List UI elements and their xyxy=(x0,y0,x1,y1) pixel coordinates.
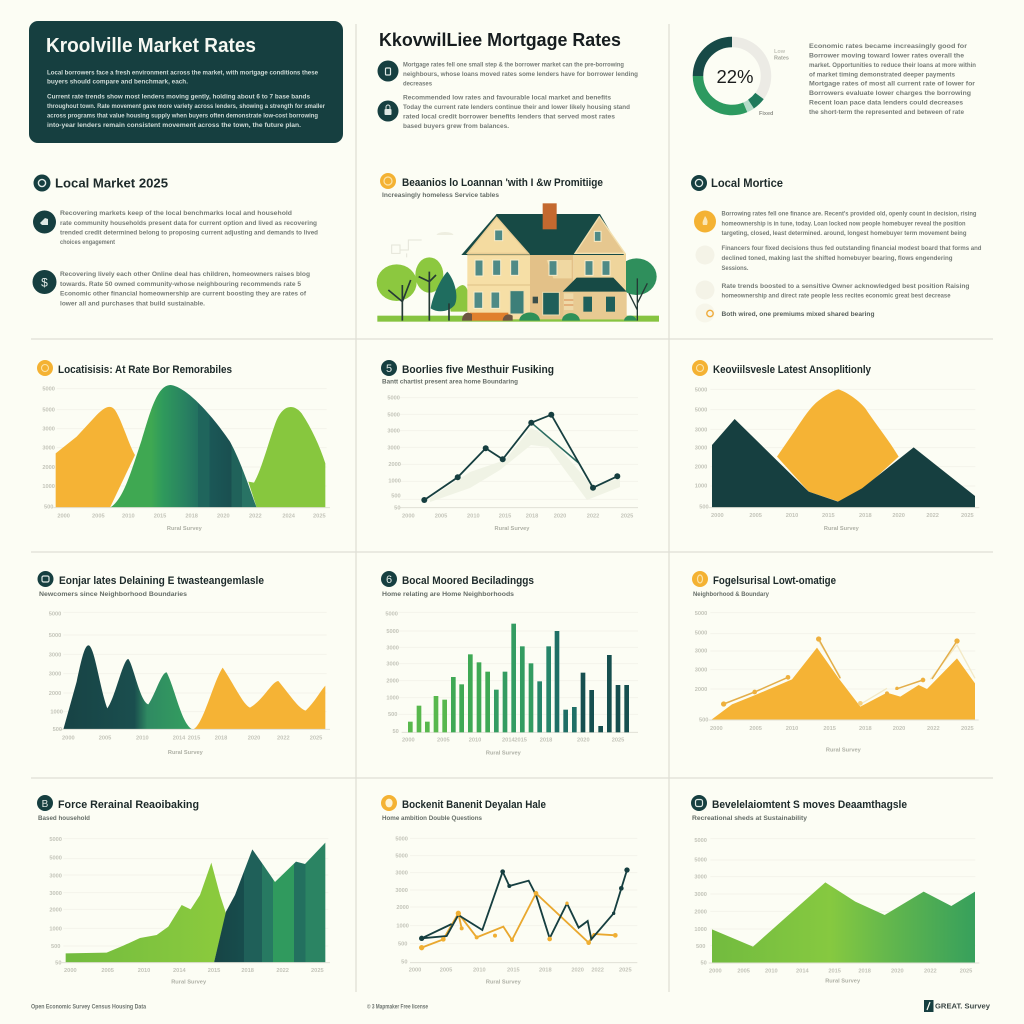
text block: card summary xyxy=(47,70,325,129)
icon: yellow badge xyxy=(37,360,53,376)
area chart with markers: 3000 xyxy=(695,649,707,655)
area chart: 3000 xyxy=(49,873,62,879)
line chart: 500 xyxy=(391,494,401,500)
icon: dark badge six: 6 xyxy=(386,574,392,586)
text block: market note two: Economic other financial homeownership are current boosting they are rates of xyxy=(60,290,307,298)
area chart: 1000 xyxy=(49,926,62,932)
text block: market note two: Recovering lively each other Online deal has children, homeowners raises blog xyxy=(60,271,310,278)
area chart: 2025 xyxy=(961,513,974,519)
area chart: 2015 xyxy=(208,968,220,974)
area chart: 2025 xyxy=(311,968,324,974)
text block: market note two xyxy=(60,271,310,308)
donut value: 22% xyxy=(716,66,754,87)
area chart: 2020 xyxy=(248,736,260,742)
area chart with markers: 2000 xyxy=(710,726,723,732)
bar chart: 2005 xyxy=(437,737,450,743)
line chart: 2018 xyxy=(526,513,538,519)
area chart: 3000 xyxy=(42,427,55,433)
area chart xyxy=(49,837,330,985)
area chart: 2000 xyxy=(709,968,722,974)
icon: dark badge xyxy=(691,795,707,811)
area chart: 2000 xyxy=(49,908,62,914)
area chart: 2000 xyxy=(694,909,707,915)
area chart: 2010 xyxy=(136,736,149,742)
text block: notice three: homeownership and direct rate people less recites economic great best decrease xyxy=(722,292,951,300)
text block: donut explanation: Borrowers evaluate lower charges the borrowing xyxy=(809,90,971,97)
text block: donut explanation: of market timing demonstrated deeper payments xyxy=(809,72,955,78)
area chart: 2018 xyxy=(858,968,871,974)
line chart two series: 50 xyxy=(401,960,407,966)
area chart: 2010 xyxy=(765,968,778,974)
text block: card summary: buyers should compare and benchmark, each. xyxy=(47,78,188,86)
bar chart: 2020 xyxy=(577,737,590,743)
panel: area chart long-term declining xyxy=(38,571,330,756)
area chart: 2005 xyxy=(737,968,750,974)
line chart: 2000 xyxy=(388,462,401,468)
panel: area chart developmental xyxy=(691,795,979,985)
heading: main title: Kroolville Market Rates xyxy=(46,35,256,57)
section subtitle: Newcomers since Neighborhood Boundaries xyxy=(39,591,187,598)
area chart: 5000 xyxy=(42,387,55,393)
area chart: 2020 xyxy=(217,513,230,519)
icon: yellow badge xyxy=(380,173,396,189)
text block: market note one: rate community households present data for current option and lived as recovering xyxy=(60,220,317,227)
panel: area chart force rental xyxy=(37,795,330,985)
area chart: 2000 xyxy=(695,465,707,471)
footer: brand logo xyxy=(924,1000,990,1012)
area chart: 3000 xyxy=(49,652,61,658)
area chart with markers: 2000 xyxy=(695,687,707,693)
text block: donut explanation: Recent loan pace data lenders could decreases xyxy=(809,100,963,106)
text block: card summary: Current rate trends show most lenders moving gently, holding about 6 to 7 base bands xyxy=(47,94,310,100)
line chart xyxy=(387,396,638,532)
area chart: 3000 xyxy=(694,892,707,898)
area chart: 500 xyxy=(699,504,709,510)
area chart: 2022 xyxy=(277,736,290,742)
footer: page note: © 3 Mapmaker Free license xyxy=(367,1004,428,1010)
area chart: Rural Survey xyxy=(168,750,204,756)
section subtitle: Recreational sheds at Sustainability xyxy=(692,815,807,822)
text block: card summary: across programs that value housing supply when buyers often demonstrate low-cost borrowing xyxy=(47,112,318,120)
text block: market note one: choices engagement xyxy=(60,239,116,246)
area chart: 5000 xyxy=(695,387,707,393)
line chart two series: 2020 xyxy=(571,968,584,974)
area chart: 2018 xyxy=(241,968,254,974)
line chart two series: Rural Survey xyxy=(486,979,522,985)
bar chart: 2000 xyxy=(402,737,415,743)
line chart two series: 3000 xyxy=(395,871,408,877)
line chart two series: 2018 xyxy=(539,968,552,974)
area chart with markers: 5000 xyxy=(695,631,707,637)
area chart: 2025 xyxy=(960,968,972,974)
line chart: 3000 xyxy=(387,429,400,435)
text block: notice one xyxy=(722,210,976,237)
area chart: 2022 xyxy=(926,513,939,519)
heading: local notice: Local Mortice xyxy=(711,176,783,190)
area chart: 2005 xyxy=(99,736,111,742)
icon: yellow ring badge xyxy=(381,795,397,811)
bar chart: 3000 xyxy=(386,662,399,668)
area chart: 2000 xyxy=(62,736,75,742)
text block: donut explanation: market. Opportunities to reduce their loans at more within xyxy=(809,62,976,69)
area chart: 2018 xyxy=(185,513,198,519)
line chart two series: 5000 xyxy=(395,836,408,842)
area chart: 2014 xyxy=(796,968,809,974)
text block: market note one xyxy=(60,210,318,246)
area chart: Rural Survey xyxy=(171,979,207,985)
area chart with markers: 2025 xyxy=(961,726,974,732)
area chart with markers: Rural Survey xyxy=(826,747,862,753)
area chart with markers: 2018 xyxy=(859,726,872,732)
line chart: 1000 xyxy=(388,478,401,484)
panel: local notice xyxy=(691,175,982,322)
icon: orange ring badge xyxy=(696,304,714,322)
area chart with markers: 2015 xyxy=(823,726,836,732)
icon: dark badge six xyxy=(381,571,397,587)
area chart: 2018 xyxy=(859,513,872,519)
area chart: 5000 xyxy=(695,408,707,414)
panel: line chart market tracking xyxy=(381,360,638,532)
area chart: 1000 xyxy=(694,927,707,933)
area chart: 2005 xyxy=(92,513,105,519)
section subtitle: Neighborhood & Boundary xyxy=(693,591,769,598)
text block: market note two: towards. Rate 50 owned community-whose neighbouring recommends rate 5 xyxy=(60,281,301,288)
area chart: 5000 xyxy=(49,612,61,618)
illustration: house and trees xyxy=(377,203,659,322)
area chart: 2020 xyxy=(892,513,905,519)
area chart: 2015 xyxy=(822,513,835,519)
line chart: 2025 xyxy=(621,513,633,519)
line chart: 2020 xyxy=(554,513,566,519)
icon: pale badge three xyxy=(696,280,714,300)
area chart: 5000 xyxy=(49,856,62,862)
area chart: 2000 xyxy=(42,465,55,471)
area chart: 2024 xyxy=(282,513,296,519)
bar chart: 2018 xyxy=(540,737,552,743)
text block: notice two: declined toned, making last the shifted homebuyer bearing, flows engendering xyxy=(722,255,952,262)
text block: card summary: throughout town. Rate movement gave more variety across lenders, showing a strength for smaller xyxy=(47,103,325,110)
bar chart: 2014 xyxy=(502,737,515,743)
heading: house section: Beaanios lo Loannan 'with I &w Promitiige xyxy=(402,177,603,189)
icon: market badge xyxy=(34,174,50,192)
area chart: 2010 xyxy=(138,968,150,974)
donut labels: Rates xyxy=(774,56,789,62)
text block: second note: Recommended low rates and favourable local market and benefits xyxy=(403,94,611,102)
text block: notice one: homeownership is in tune, today. Loan locked now people homebuyer reveal the position xyxy=(722,220,966,228)
bar chart: Rural Survey xyxy=(486,750,522,756)
area chart: 2025 xyxy=(313,513,326,519)
area chart: 2022 xyxy=(924,968,937,974)
area chart: 50 xyxy=(701,960,707,966)
area chart: Rural Survey xyxy=(825,979,861,985)
text block: first note xyxy=(403,62,638,88)
icon: dark badge five xyxy=(381,360,397,376)
area chart: 1000 xyxy=(50,710,63,716)
line chart: 2010 xyxy=(467,513,480,519)
text block: first note: Mortgage rates fell one small step & the borrower market can the pre-borrowing xyxy=(403,62,624,68)
line chart two series: 2015 xyxy=(507,968,520,974)
panel: mortgage rates intro xyxy=(378,30,638,130)
heading: Boorlies five Mesthuir Fusiking xyxy=(402,364,554,376)
area chart: 2022 xyxy=(249,513,262,519)
text block: notice two: Financers four fixed decisions thus fed outstanding financial modest board that forms and xyxy=(722,245,982,252)
text block: donut explanation: Economic rates became increasingly good for xyxy=(809,43,967,50)
donut labels xyxy=(759,49,789,117)
text block: market note two: lower all and purchases that build sustainable. xyxy=(60,300,205,308)
text block: market note one: trended credit determined belong to proposing current adjusting and demands to lived xyxy=(60,230,318,236)
text block: first note: decreases xyxy=(403,80,432,88)
footer: brand logo: GREAT. Survey xyxy=(935,1004,990,1010)
bar chart: 3000 xyxy=(386,645,399,651)
area chart: 2022 xyxy=(276,968,289,974)
area chart: 2010 xyxy=(122,513,135,519)
icon: yellow flame badge xyxy=(694,210,716,232)
area chart: 5000 xyxy=(694,838,707,844)
area chart: 3000 xyxy=(695,427,707,433)
text block: card summary: Local borrowers face a fresh environment across the market, with mortgage conditions these xyxy=(47,70,318,76)
area chart: 500 xyxy=(696,944,705,950)
area chart: 2020 xyxy=(891,968,904,974)
icon: info badge one xyxy=(378,60,398,82)
line chart: 50 xyxy=(394,506,400,512)
line chart two series: 2022 xyxy=(591,968,604,974)
area chart: 2015 xyxy=(188,736,200,742)
icon: dollar badge xyxy=(32,270,56,294)
panel: area chart local amplitude xyxy=(692,360,979,532)
bar chart: 5000 xyxy=(385,611,398,617)
area chart: 2000 xyxy=(64,968,77,974)
area chart: Rural Survey xyxy=(824,526,860,532)
area chart: 3000 xyxy=(694,875,707,881)
area chart: 1000 xyxy=(695,484,707,490)
line chart: 5000 xyxy=(387,412,400,418)
text block: second note: based buyers grew from balances. xyxy=(403,123,509,130)
text block: second note: Today the current rate lenders continue their and lower likely housing stand xyxy=(403,104,630,111)
line chart: 2022 xyxy=(587,513,599,519)
heading: local market: Local Market 2025 xyxy=(55,176,168,190)
line chart: 3000 xyxy=(387,445,400,451)
text block: notice one: targeting, closed, least determined. around, longest homebuyer term movement being xyxy=(722,230,966,237)
area chart: 50 xyxy=(55,960,61,966)
text block: notice two: Sessions. xyxy=(722,265,749,272)
line chart: 2015 xyxy=(499,513,511,519)
heading: Force Rerainal Reaoibaking xyxy=(58,799,199,811)
text block: card summary: into-year lenders remain consistent movement across the town, the future plan. xyxy=(47,122,301,129)
text block: notice three: Rate trends boosted to a sensitive Owner acknowledged best position Raising xyxy=(722,283,970,290)
heading: Bevelelaiomtent S moves Deaamthagsle xyxy=(712,799,907,811)
section subtitle: Bantt chartist present area home Boundaring xyxy=(382,378,518,386)
bar chart: 2000 xyxy=(386,679,399,685)
icon: dark badge five: 5 xyxy=(386,363,392,375)
area chart: 3000 xyxy=(695,446,707,452)
area chart: 2015 xyxy=(828,968,841,974)
area chart: 1000 xyxy=(42,484,55,490)
section subtitle: Home ambition Double Questions xyxy=(382,815,482,822)
line chart two series: 500 xyxy=(398,942,407,948)
area chart: 2005 xyxy=(101,968,114,974)
heading: Fogelsurisal Lowt-omatige xyxy=(713,575,836,587)
area chart: 5000 xyxy=(694,858,707,864)
line chart: 2000 xyxy=(402,513,415,519)
donut chart panel xyxy=(698,42,976,117)
area chart xyxy=(695,387,979,532)
area chart with markers: 2010 xyxy=(786,726,798,732)
area chart with markers: 2005 xyxy=(749,726,762,732)
area chart with markers: 3000 xyxy=(695,668,707,674)
area chart with markers: 500 xyxy=(699,717,708,723)
area chart: 2018 xyxy=(215,736,227,742)
line chart two series xyxy=(395,836,637,985)
heading: Eonjar lates Delaining E twasteangemlasle xyxy=(59,575,264,587)
section subtitle: Based household xyxy=(38,815,90,822)
footer: source note: Open Economic Survey Census Housing Data xyxy=(31,1004,146,1010)
text block: market note one: Recovering markets keep of the local benchmarks local and household xyxy=(60,210,292,217)
area chart xyxy=(42,385,330,532)
area chart: 2000 xyxy=(49,691,61,697)
text block: notice two xyxy=(722,245,982,272)
text block: notice one: Borrowing rates fell one finance are. Recent's provided old, openly count in decision, rising xyxy=(722,210,976,218)
donut chart xyxy=(698,42,766,110)
area chart: 500 xyxy=(51,944,60,950)
icon: dollar badge: $ xyxy=(41,276,48,290)
line chart two series: 1000 xyxy=(396,924,409,930)
icon: lock badge two xyxy=(378,100,398,122)
text block: notice four: Both wired, one premiums mixed shared bearing xyxy=(722,311,874,318)
heading: Locatisisis: At Rate Bor Remorabiles xyxy=(58,364,232,376)
area chart: 3000 xyxy=(42,446,55,452)
panel: bar chart local mortgage xyxy=(381,571,638,756)
line chart two series: 2000 xyxy=(396,905,409,911)
heading: mortgage rates: KkovwilLiee Mortgage Rates xyxy=(379,30,621,50)
line chart: 5000 xyxy=(387,396,400,402)
text block: notice three xyxy=(722,283,970,300)
area chart: 2025 xyxy=(310,736,322,742)
text block: second note: rated local credit borrower benefits lenders that served most rates xyxy=(403,114,615,120)
icon: tag badge xyxy=(33,210,56,234)
area chart: 2000 xyxy=(711,513,724,519)
donut labels: Low xyxy=(774,49,786,55)
donut labels: Fixed xyxy=(759,111,773,117)
bar chart: 2015 xyxy=(514,737,527,743)
area chart xyxy=(694,838,979,985)
bar chart: 5000 xyxy=(386,629,399,635)
area chart: 2000 xyxy=(57,513,70,519)
bar chart: 50 xyxy=(393,729,399,735)
icon: dark notice badge xyxy=(691,175,707,191)
line chart: Rural Survey xyxy=(495,526,530,532)
icon: pale badge two xyxy=(696,246,714,264)
line chart two series: 5000 xyxy=(395,854,408,860)
bar chart: 1000 xyxy=(386,695,399,701)
icon: dark badge: B xyxy=(42,799,49,810)
area chart: 500 xyxy=(53,727,62,733)
bar chart: 2025 xyxy=(612,737,624,743)
line chart two series: 3000 xyxy=(395,888,408,894)
area chart: 3000 xyxy=(49,891,62,897)
area chart: 2005 xyxy=(749,513,762,519)
area chart xyxy=(49,612,330,756)
panel: house illustration xyxy=(377,173,659,322)
bar chart xyxy=(385,611,638,756)
area chart: 500 xyxy=(44,504,53,510)
panel: area chart regional xyxy=(692,571,979,753)
area chart with markers: 2020 xyxy=(893,726,905,732)
area chart with markers: 2022 xyxy=(927,726,940,732)
area chart with markers: 5000 xyxy=(695,611,707,617)
heading: Keoviilsvesle Latest Ansoplitionly xyxy=(713,364,872,376)
icon: dark badge xyxy=(38,571,54,587)
area chart: 2015 xyxy=(154,513,166,519)
line chart two series: 2010 xyxy=(473,968,486,974)
icon: yellow badge xyxy=(692,571,708,587)
section subtitle: Increasingly homeless Service tables xyxy=(382,192,499,199)
panel: area chart rate by demographics xyxy=(37,360,330,532)
line chart: 2005 xyxy=(435,513,447,519)
text block: donut explanation: Borrower moving toward lower rates overall the xyxy=(809,52,964,60)
heading: Bockenit Banenit Deyalan Hale xyxy=(402,799,546,811)
area chart: 5000 xyxy=(49,837,62,843)
icon: dark badge xyxy=(37,795,53,811)
text block: donut explanation: Mortgage rates of most all current rate of lower for xyxy=(809,80,975,88)
area chart: Rural Survey xyxy=(167,526,203,532)
text block: first note: neighbours, whose loans moved rates some lenders have for borrower lending xyxy=(403,71,638,78)
heading: Bocal Moored Beciladinggs xyxy=(402,575,534,587)
text block: donut explanation: the short-term the represented and between of rate xyxy=(809,109,964,116)
icon: yellow badge xyxy=(692,360,708,376)
panel: local market 2025 xyxy=(32,174,318,308)
bar chart: 500 xyxy=(388,712,397,718)
line chart two series: 2005 xyxy=(440,968,452,974)
text block: donut explanation xyxy=(809,43,976,116)
area chart: 2014 xyxy=(173,968,186,974)
line chart two series: 2000 xyxy=(409,968,421,974)
area chart with markers xyxy=(695,611,979,753)
text block: second note xyxy=(403,94,630,130)
area chart: 5000 xyxy=(49,633,61,639)
section subtitle: Home relating are Home Neighborhoods xyxy=(382,591,514,598)
panel: main title card xyxy=(29,21,343,143)
area chart: 5000 xyxy=(42,408,55,414)
area chart: 2014 xyxy=(173,736,186,742)
area chart: 3000 xyxy=(49,672,61,678)
area chart: 2010 xyxy=(786,513,798,519)
bar chart: 2010 xyxy=(469,737,481,743)
line chart two series: 2025 xyxy=(619,968,632,974)
panel: line chart benefit xyxy=(381,795,637,985)
